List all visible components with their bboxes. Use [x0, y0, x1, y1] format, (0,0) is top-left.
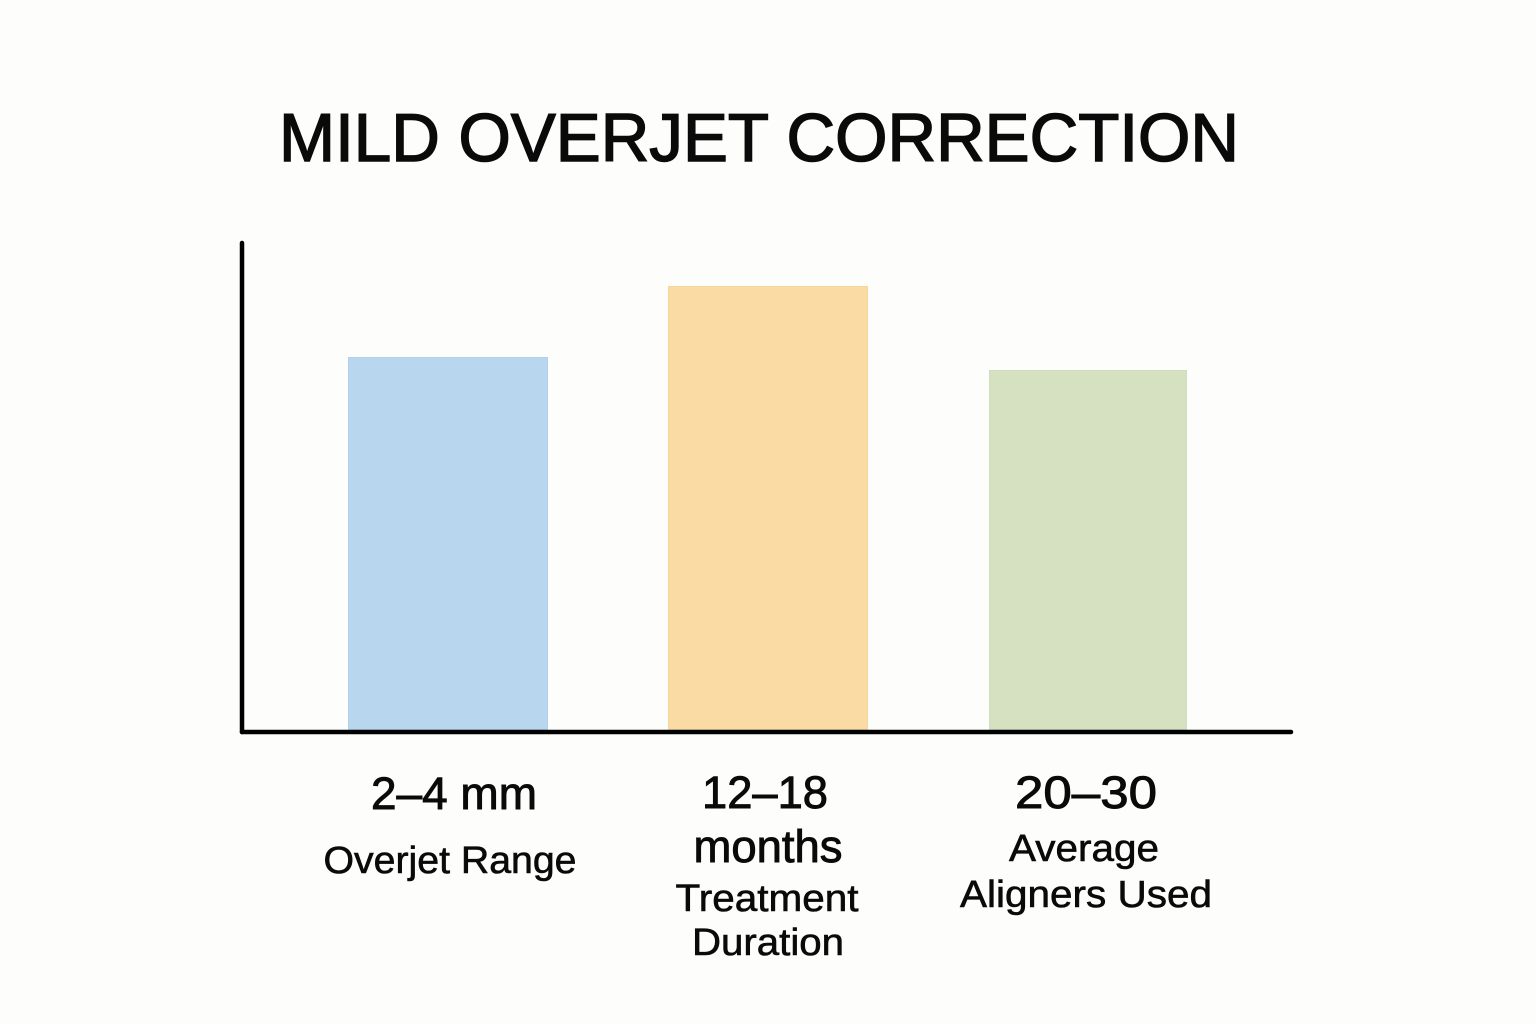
title: MILD OVERJET CORRECTION: [279, 100, 1239, 176]
y axis: [240, 243, 244, 732]
label: treatment duration: 12–18: [702, 767, 828, 818]
bar chart: [242, 243, 1291, 732]
label: overjet range: Overjet Range: [324, 840, 576, 882]
label: aligners used: Average: [1009, 828, 1159, 870]
label: overjet range: [324, 768, 576, 882]
label: aligners used: 20–30: [1015, 767, 1157, 818]
label: treatment duration: months: [694, 821, 842, 872]
label: treatment duration: Treatment: [676, 878, 859, 920]
label: treatment duration: Duration: [692, 922, 844, 964]
x axis: [242, 730, 1291, 734]
bar: treatment duration: [668, 286, 868, 730]
label: aligners used: Aligners Used: [960, 874, 1212, 916]
label: aligners used: [960, 767, 1212, 916]
bar: aligners used: [990, 370, 1186, 730]
label: treatment duration: [676, 767, 859, 964]
label: overjet range: 2–4 mm: [371, 768, 537, 819]
bar: overjet range: [348, 358, 548, 730]
